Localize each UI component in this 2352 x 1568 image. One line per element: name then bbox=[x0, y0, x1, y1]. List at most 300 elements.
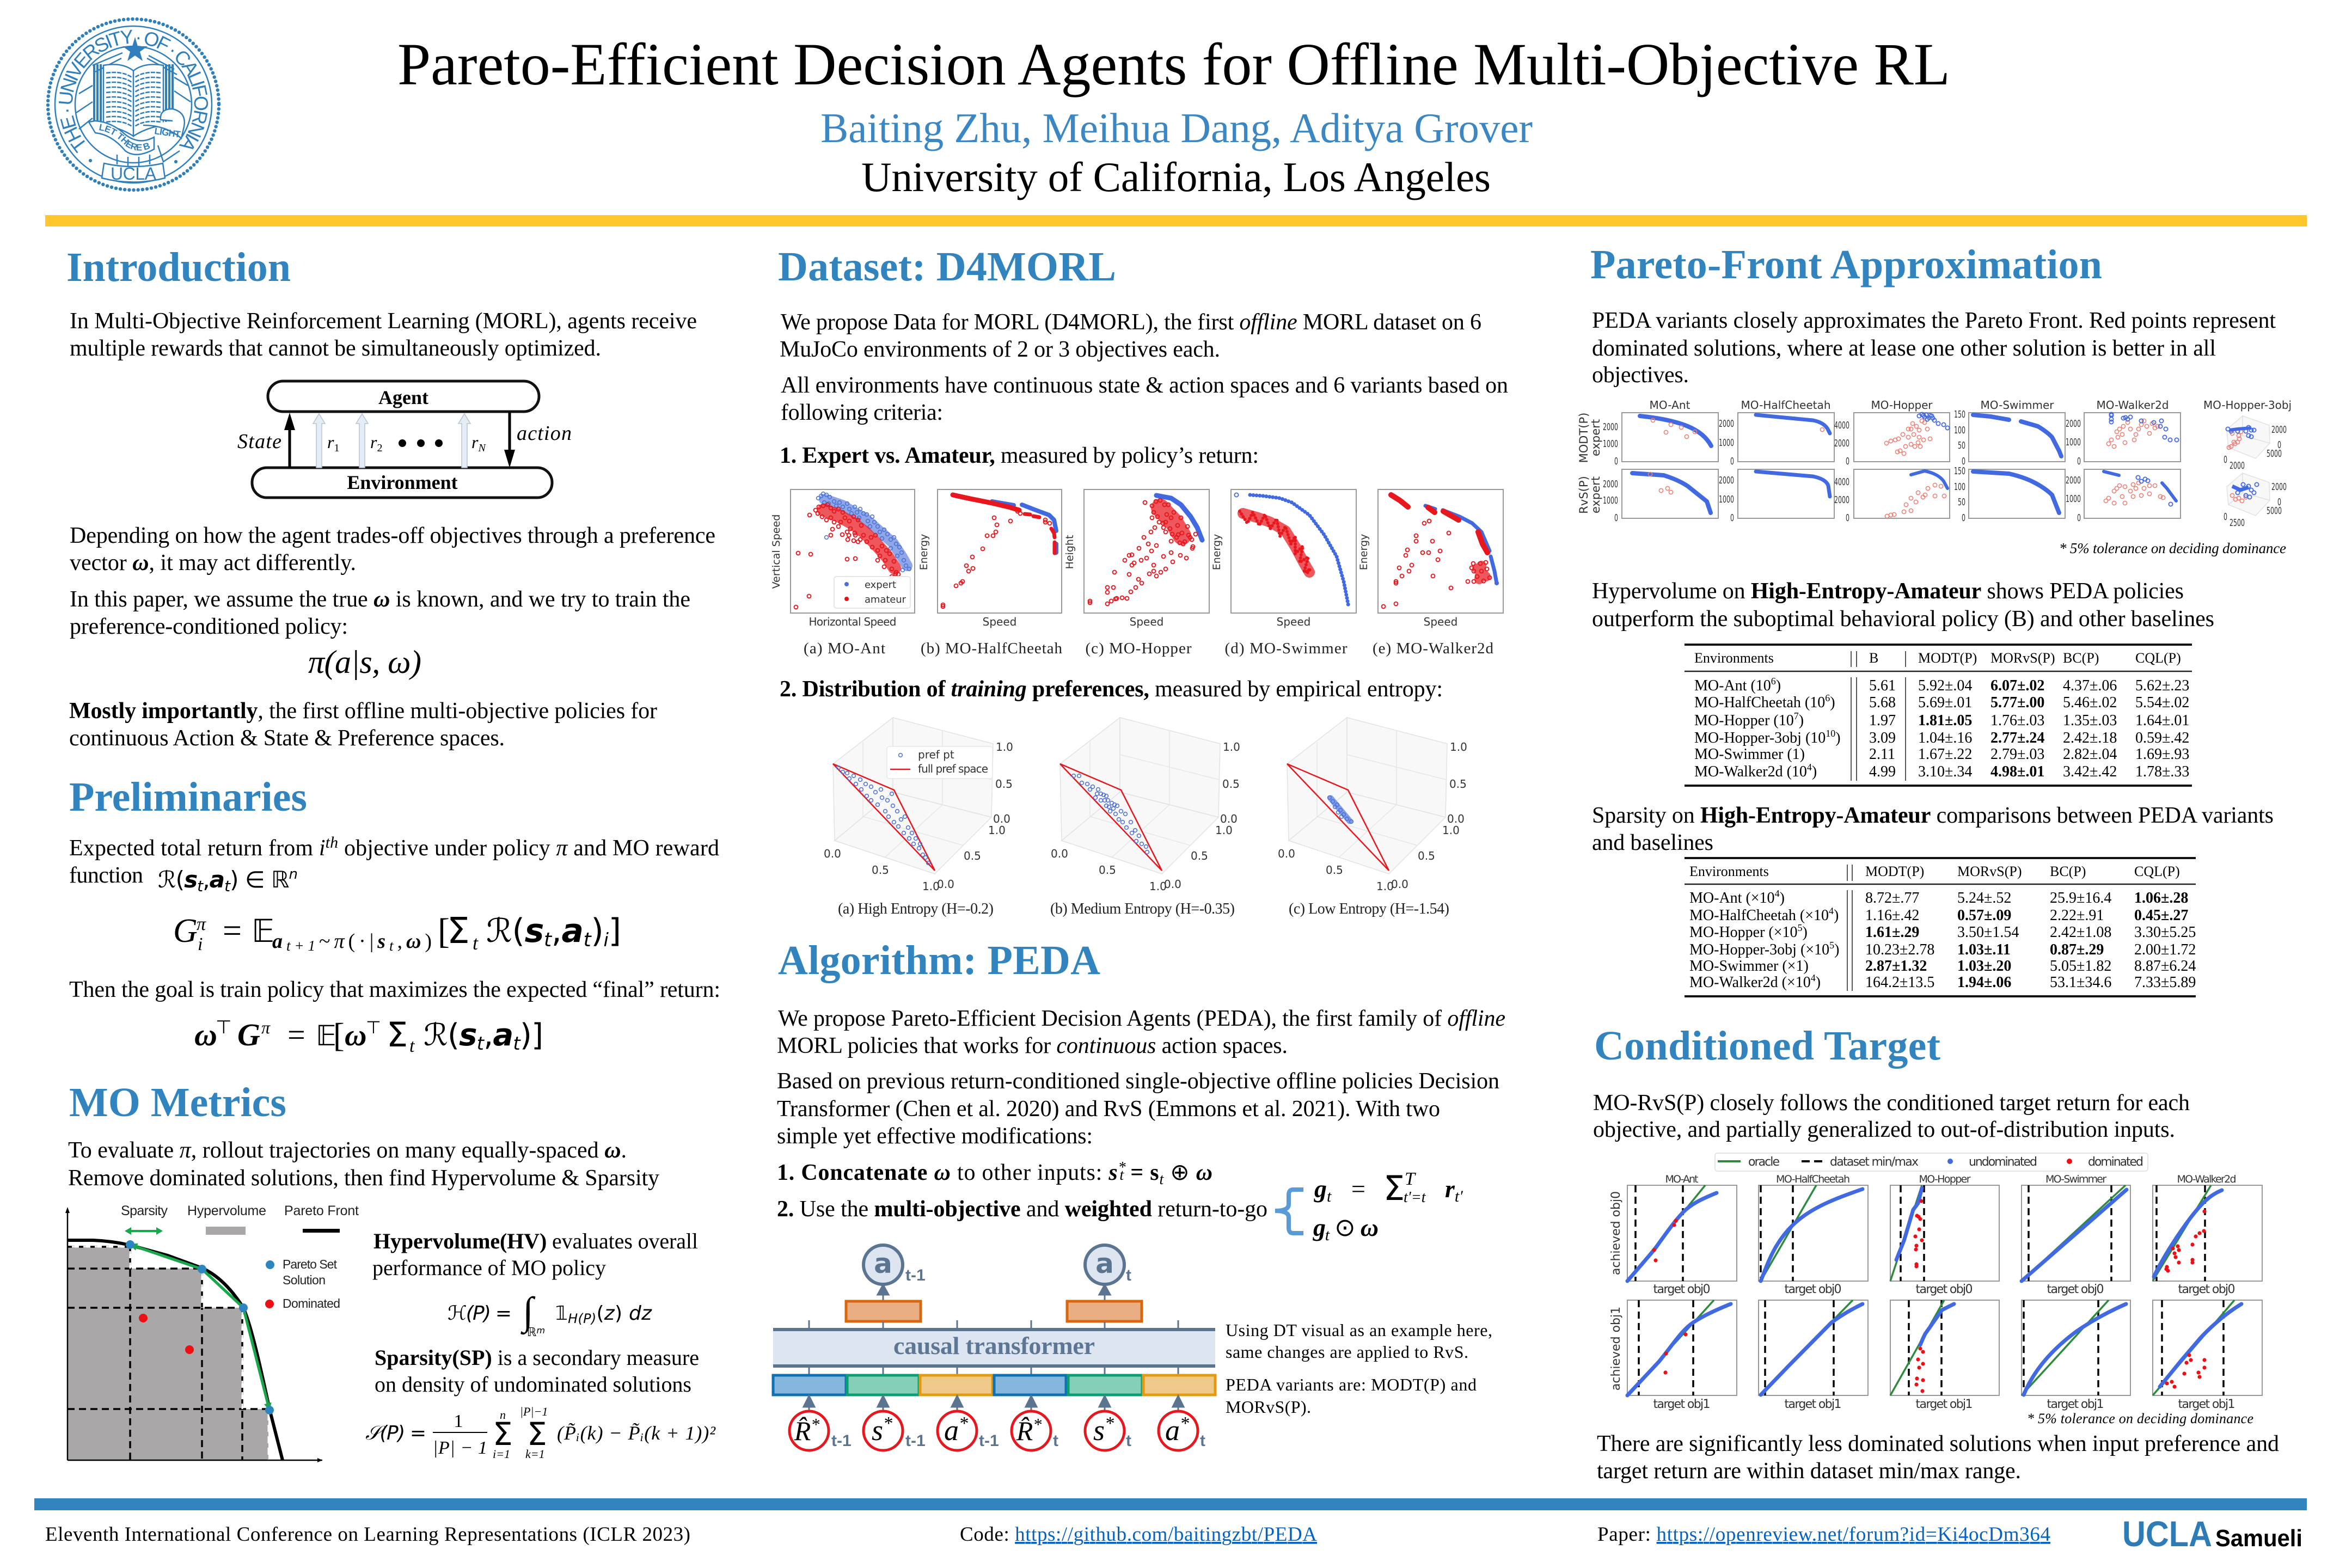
table: sparsity: ) bbox=[1834, 941, 1839, 958]
table: hypervolume: MO-Swimmer (1) bbox=[1694, 746, 1805, 763]
table: sparsity: MO-Hopper-3obj (×10 bbox=[1689, 941, 1829, 958]
plot: MODT Walker2d: 0 bbox=[2077, 456, 2081, 467]
plot: obj1 Walker2d bbox=[2153, 1300, 2262, 1395]
formula: return to go: t′ bbox=[1455, 1187, 1463, 1205]
input tokens: * bbox=[883, 1413, 892, 1434]
table: hypervolume: 5.62±.23 bbox=[2135, 677, 2189, 694]
plot: MODT Walker2d: 1000 bbox=[2066, 437, 2081, 448]
plot: MODT Hopper-3obj: 0 bbox=[2224, 454, 2227, 465]
text: conditioned target: MO-RvS(P) closely follows the conditioned target return for each bbox=[1593, 1091, 2190, 1116]
formula: objective return: i bbox=[198, 934, 203, 954]
formula: sparsity: 𝒮(P) = bbox=[365, 1422, 426, 1444]
plot: obj1 HalfCheetah bbox=[1759, 1300, 1868, 1395]
text: modification 1: * bbox=[1118, 1159, 1126, 1176]
table: sparsity: 0.87±.29 bbox=[2050, 941, 2104, 958]
formula: scalarized return: = bbox=[287, 1017, 305, 1052]
formula: hypervolume: ℋ(P) = bbox=[448, 1302, 512, 1325]
input tokens: t bbox=[1200, 1432, 1205, 1450]
table: sparsity: ) bbox=[1803, 924, 1808, 941]
formula: objective return: [ bbox=[438, 911, 450, 951]
formula: sparsity: n bbox=[500, 1408, 506, 1422]
plot: MODT Ant bbox=[1603, 413, 1718, 467]
table: sparsity: 7.33±5.89 bbox=[2134, 974, 2196, 991]
plot: MODT Swimmer bbox=[1954, 409, 2065, 467]
text: modification 1: 1. Concatenate ω to other inputs: s bbox=[777, 1160, 1118, 1185]
output actions: t bbox=[1126, 1266, 1131, 1284]
3d plot: medium entropy: 0.5 bbox=[1191, 849, 1208, 862]
formula: return to go: = bbox=[1351, 1175, 1365, 1203]
3d plot: medium entropy: 0.5 bbox=[1099, 863, 1116, 877]
table: sparsity: MO-Hopper (×10 bbox=[1689, 924, 1798, 941]
axis labels: target obj0 bbox=[1785, 1283, 1841, 1296]
legend: conditioned target plots bbox=[1715, 1153, 2148, 1171]
table: hypervolume: 5.61 bbox=[1869, 677, 1896, 694]
plot: MODT Walker2d bbox=[2066, 413, 2180, 467]
input tokens: s bbox=[872, 1414, 883, 1447]
plot: MODT Hopper: 4000 bbox=[1834, 420, 1849, 431]
axis labels: target obj1 bbox=[2178, 1398, 2235, 1411]
plot: MODT Hopper: 0 bbox=[1846, 456, 1849, 467]
3d plot: high entropy: 0.0 bbox=[824, 847, 841, 860]
text: dominated solutions line 2: target return are within dataset min/max range. bbox=[1597, 1459, 2021, 1484]
scatter: MO-Hopper bbox=[1064, 489, 1209, 628]
3d plot: medium entropy: 0.0 bbox=[1051, 847, 1068, 860]
table: sparsity: MO-Swimmer (×1) bbox=[1689, 958, 1809, 975]
formula: sparsity: |P|−1 bbox=[520, 1405, 548, 1418]
table: hypervolume: MO-Hopper (10 bbox=[1694, 712, 1794, 729]
text: importance line 2: continuous Action & State & Preference spaces. bbox=[69, 726, 505, 751]
text: proposal: We propose Data for MORL (D4MORL), the first offline MORL dataset on 6 bbox=[781, 310, 1481, 335]
formula: objective return: π bbox=[197, 914, 206, 934]
text: hypervolume line 2: performance of MO policy bbox=[372, 1255, 606, 1280]
intro text line 2: multiple rewards that cannot be simultaneously optimized. bbox=[70, 336, 601, 361]
text: PEDA proposal: We propose Pareto-Efficient Decision Agents (PEDA), the first family of offline bbox=[778, 1006, 1505, 1031]
3d plot: medium entropy bbox=[1051, 718, 1240, 893]
plot: MODT Walker2d: 2000 bbox=[2066, 418, 2081, 430]
formula: sparsity: Σ bbox=[493, 1416, 513, 1453]
3d plot: medium entropy: 1.0 bbox=[1149, 880, 1167, 893]
plot: RvS Hopper-3obj: 5000 bbox=[2267, 505, 2282, 517]
causal transformer block: causal transformer bbox=[893, 1332, 1095, 1359]
formula: scalarized return bbox=[194, 1015, 543, 1056]
logo: UCLA Samueli: Samueli bbox=[2215, 1525, 2302, 1552]
captions: return scatter plots: (c) MO-Hopper bbox=[1086, 640, 1192, 657]
row labels: expert bbox=[1589, 419, 1602, 456]
formula: hypervolume bbox=[448, 1289, 652, 1339]
table: sparsity: 164.2±13.5 bbox=[1865, 974, 1934, 991]
formula: return to go: g bbox=[1314, 1175, 1327, 1203]
3d plot: high entropy: 0.5 bbox=[964, 849, 981, 862]
plot: RvS Hopper: 4000 bbox=[1834, 476, 1849, 488]
table: sparsity: 5 bbox=[1829, 940, 1834, 951]
3d plot: medium entropy: 0.0 bbox=[1220, 812, 1238, 825]
footnote: tolerance: * 5% tolerance on deciding dominance bbox=[2059, 540, 2286, 556]
heading: pareto-front approximation: Pareto-Front Approximation bbox=[1590, 242, 2102, 287]
3d plot: high entropy: full pref space bbox=[918, 762, 988, 775]
plot: MODT HalfCheetah: 1000 bbox=[1719, 437, 1734, 449]
scatter: MO-Ant: Horizontal Speed bbox=[809, 615, 896, 628]
table: hypervolume: 6.07±.02 bbox=[1990, 677, 2044, 694]
footer: code link: Code: https://github.com/baitingzbt/PEDA bbox=[960, 1523, 1317, 1546]
text: modification 2: 2. Use the multi-objective and weighted return-to-go bbox=[777, 1197, 1267, 1222]
plot: MODT Hopper-3obj: 2000 bbox=[2271, 424, 2287, 436]
formula: scalarized return: t bbox=[513, 1033, 521, 1055]
formula: scalarized return: G bbox=[237, 1017, 260, 1052]
affiliation: University of California, Los Angeles bbox=[861, 154, 1491, 200]
input tokens: * bbox=[811, 1414, 819, 1434]
table: sparsity: 1.06±.28 bbox=[2134, 890, 2188, 906]
header: university seal: UCLA bbox=[111, 164, 157, 183]
text: evaluate: To evaluate π, rollout trajectories on many equally-spaced ω. bbox=[68, 1138, 627, 1163]
table: sparsity: MO-Ant (×10 bbox=[1689, 890, 1775, 906]
text: expected return: th bbox=[326, 834, 338, 852]
formula: return to go bbox=[1314, 1168, 1463, 1208]
note: DT visual line 2: same changes are applied to RvS. bbox=[1226, 1342, 1468, 1362]
header: university seal: LIGHT bbox=[154, 126, 181, 140]
formula: sparsity bbox=[365, 1405, 716, 1461]
3d plot: high entropy: 0.0 bbox=[937, 878, 954, 891]
plot: obj0 Walker2d bbox=[2153, 1185, 2262, 1281]
scatter: MO-Swimmer bbox=[1211, 489, 1356, 628]
plot: RvS Hopper-3obj: 2500 bbox=[2230, 517, 2245, 529]
input tokens: t bbox=[1126, 1432, 1131, 1450]
axis labels: target obj1 bbox=[1785, 1398, 1841, 1411]
plot: RvS Hopper: 2000 bbox=[1834, 494, 1849, 506]
formula: sparsity: (P̃ᵢ(k) − P̃ᵢ(k + 1))² bbox=[557, 1422, 716, 1444]
table: hypervolume: 5.77±.00 bbox=[1990, 694, 2044, 711]
legend: conditioned target plots: dominated bbox=[2088, 1155, 2143, 1169]
plot: RvS Hopper-3obj: 0 bbox=[2224, 511, 2227, 523]
table: sparsity: 0.45±.27 bbox=[2134, 907, 2188, 924]
axis labels: target obj0 bbox=[2178, 1283, 2235, 1296]
table: hypervolume: 5.46±.02 bbox=[2063, 694, 2117, 711]
plot: RvS HalfCheetah: 0 bbox=[1730, 512, 1734, 524]
plot titles: MO-Ant bbox=[1650, 399, 1690, 412]
panel: MO metrics bbox=[65, 1080, 716, 1462]
input tokens bbox=[789, 1411, 1205, 1450]
plot: RvS Walker2d: 0 bbox=[2077, 512, 2081, 524]
plot: RvS Swimmer bbox=[1954, 465, 2065, 524]
formula: reward function: t bbox=[197, 877, 204, 895]
plot titles: MO-Swimmer bbox=[1981, 399, 2054, 412]
formula: scalarized return: t bbox=[409, 1036, 415, 1056]
text: based on line 2: Transformer (Chen et al. 2020) and RvS (Emmons et al. 2021). With two bbox=[777, 1097, 1440, 1122]
input tokens: * bbox=[1180, 1413, 1189, 1434]
table: sparsity: MORvS(P) bbox=[1957, 863, 2022, 879]
diagram: agent environment loop: 1 bbox=[334, 442, 339, 454]
formula: scalarized return: t bbox=[477, 1033, 485, 1055]
formula: objective return: i bbox=[603, 929, 609, 951]
input tokens: R̂ bbox=[1016, 1416, 1033, 1446]
3d plot: high entropy: 1.0 bbox=[996, 740, 1013, 754]
legend: conditioned target plots: oracle bbox=[1748, 1155, 1780, 1169]
table: sparsity: 2.22±.91 bbox=[2050, 907, 2104, 924]
3d plot: low entropy: 0.0 bbox=[1278, 847, 1295, 860]
plot titles: MO-Ant bbox=[1665, 1173, 1699, 1185]
captions: return scatter plots: (a) MO-Ant bbox=[804, 640, 885, 657]
plot: MODT HalfCheetah bbox=[1719, 413, 1834, 467]
diagram: agent environment loop bbox=[237, 381, 572, 498]
table: sparsity: 5.24±.52 bbox=[1957, 890, 2011, 906]
plot: RvS Hopper: 0 bbox=[1846, 512, 1849, 524]
table: hypervolume: 5.68 bbox=[1869, 694, 1896, 711]
table: hypervolume: ) bbox=[1812, 763, 1817, 780]
table: sparsity: ) bbox=[1780, 890, 1785, 906]
heading: introduction: Introduction bbox=[66, 244, 291, 290]
scatter: MO-HalfCheetah: Speed bbox=[983, 615, 1016, 628]
output actions: a bbox=[874, 1248, 892, 1279]
formula: scalarized return: ⊤ bbox=[216, 1018, 232, 1038]
table: hypervolume: 3.42±.42 bbox=[2063, 763, 2117, 780]
scatter: MO-Ant: expert bbox=[865, 579, 896, 591]
table: hypervolume: 2.11 bbox=[1869, 746, 1895, 763]
plot titles: MO-Hopper bbox=[1871, 399, 1933, 412]
formula: sparsity: |P| − 1 bbox=[433, 1438, 487, 1458]
scatter: MO-Walker2d: Energy bbox=[1358, 534, 1370, 570]
3d plot: low entropy: 0.5 bbox=[1418, 849, 1435, 862]
input arrows bbox=[804, 1396, 1184, 1410]
table: hypervolume: 1.78±.33 bbox=[2135, 763, 2189, 780]
header: university seal: LET THERE BE bbox=[99, 124, 150, 150]
text: goal: Then the goal is train policy that maximizes the expected “final” return: bbox=[69, 977, 720, 1002]
text: conditioned target line 2: objective, and partially generalized to out-of-distribution inputs. bbox=[1593, 1117, 2175, 1142]
chart: pareto front staircase: Pareto Front bbox=[284, 1203, 359, 1218]
table: hypervolume: ) bbox=[1799, 712, 1804, 729]
text: expected return: π and MO reward bbox=[556, 836, 719, 861]
formula: objective return: Σ bbox=[447, 910, 470, 952]
formula: objective return: a bbox=[561, 912, 584, 950]
axis labels: achieved obj0 bbox=[1609, 1191, 1623, 1275]
table: sparsity: MO-HalfCheetah (×10 bbox=[1689, 907, 1829, 924]
output actions bbox=[846, 1245, 1142, 1321]
formula: objective return: a bbox=[272, 930, 283, 953]
table: hypervolume: 1.97 bbox=[1869, 712, 1896, 729]
heading: dataset: Dataset: D4MORL bbox=[778, 244, 1116, 290]
text: assumption line 2: preference-conditioned policy: bbox=[70, 614, 348, 639]
table: hypervolume: 5.54±.02 bbox=[2135, 694, 2189, 711]
axis labels: target obj1 bbox=[2047, 1398, 2104, 1411]
input tokens: t-1 bbox=[831, 1432, 852, 1450]
plot: MODT HalfCheetah: 0 bbox=[1730, 456, 1734, 467]
plot: RvS Hopper-3obj: 2000 bbox=[2271, 481, 2287, 493]
formula: scalarized return: ⊤ bbox=[366, 1018, 381, 1037]
plot: MODT Swimmer: 0 bbox=[1962, 456, 1965, 467]
formula: return to go: Σ bbox=[1383, 1168, 1405, 1208]
formula: scalarized return: Σ bbox=[387, 1015, 408, 1055]
formula: reward function: ) ∈ ℝ bbox=[230, 866, 289, 893]
3d plot: high entropy: 1.0 bbox=[922, 880, 940, 893]
footer: paper link: Paper: https://openreview.net/forum?id=Ki4ocDm364 bbox=[1597, 1523, 2050, 1546]
formula: scalarized return: , bbox=[483, 1018, 493, 1053]
plot titles: MO-HalfCheetah bbox=[1776, 1173, 1850, 1185]
plot: obj0 Ant bbox=[1627, 1185, 1737, 1281]
table: sparsity: 5 bbox=[1798, 922, 1803, 933]
table: sparsity: 1.16±.42 bbox=[1865, 907, 1919, 924]
plot: MODT Ant: 2000 bbox=[1603, 421, 1618, 433]
3d plot: low entropy bbox=[1278, 718, 1467, 893]
formula: sparsity: i=1 bbox=[493, 1447, 510, 1461]
scatter: MO-Ant: Vertical Speed bbox=[770, 514, 782, 589]
plot: RvS Walker2d: 2000 bbox=[2066, 475, 2081, 486]
table: hypervolume: 6 bbox=[1771, 676, 1776, 687]
formula: objective return: 𝔼 bbox=[252, 912, 274, 950]
table: sparsity: 2.87±1.32 bbox=[1865, 958, 1927, 975]
table: sparsity: 53.1±34.6 bbox=[2050, 974, 2111, 991]
formula: reward function: , bbox=[203, 866, 210, 893]
text: remove dominated: Remove dominated solutions, then find Hypervolume & Sparsity bbox=[68, 1166, 659, 1191]
plot: obj0 HalfCheetah bbox=[1759, 1185, 1868, 1281]
text: preference vector: Depending on how the agent trades-off objectives through a preference bbox=[70, 523, 715, 548]
formula: return to go: r bbox=[1445, 1175, 1455, 1203]
plot titles: MO-Swimmer bbox=[2045, 1173, 2106, 1185]
formula: objective return: G bbox=[173, 912, 198, 950]
text: hypervolume: Hypervolume(HV) evaluates overall bbox=[373, 1229, 698, 1253]
formula: objective return: t+1 bbox=[286, 938, 315, 954]
diagram: agent environment loop: Agent bbox=[378, 387, 428, 408]
formula: reward function: a bbox=[210, 866, 225, 893]
row labels: expert bbox=[1589, 476, 1602, 513]
chart: pareto front staircase: Solution bbox=[283, 1273, 326, 1287]
text: environments line 2: following criteria: bbox=[781, 400, 943, 425]
captions: return scatter plots: (e) MO-Walker2d bbox=[1373, 640, 1494, 657]
table: sparsity: CQL(P) bbox=[2134, 863, 2180, 879]
row labels bbox=[1577, 413, 1602, 514]
text: approximation line 2: dominated solutions, where at lease one other solution is better in all bbox=[1592, 336, 2216, 361]
plot: obj0 Swimmer bbox=[2022, 1185, 2130, 1281]
formula: reward function: t bbox=[224, 877, 231, 895]
table: hypervolume: Environments bbox=[1694, 650, 1774, 666]
text: dominated solutions: There are significantly less dominated solutions when input preference and bbox=[1597, 1431, 2279, 1456]
authors: Baiting Zhu, Meihua Dang, Aditya Grover bbox=[820, 105, 1533, 151]
heading: preliminaries: Preliminaries bbox=[69, 774, 307, 820]
plot: MODT Hopper-3obj: 2000 bbox=[2230, 460, 2245, 471]
text: proposal line 2: MuJoCo environments of 2 or 3 objectives each. bbox=[780, 337, 1220, 362]
table: hypervolume: 7 bbox=[1794, 710, 1799, 721]
plot: MODT Hopper-3obj: 0 bbox=[2277, 439, 2281, 451]
scatter: MO-Hopper: Speed bbox=[1130, 615, 1163, 628]
text: sparsity line 2: on density of undominated solutions bbox=[375, 1372, 691, 1396]
table: hypervolume: 10 bbox=[1826, 728, 1835, 739]
formula: objective return: t bbox=[544, 929, 553, 951]
3d plot: low entropy: 0.0 bbox=[1391, 878, 1408, 891]
table: hypervolume: MO-Hopper-3obj (10 bbox=[1694, 730, 1826, 746]
chart: pareto front staircase: Sparsity bbox=[121, 1203, 168, 1218]
captions: return scatter plots: (b) MO-HalfCheetah bbox=[921, 640, 1063, 657]
3d plot: medium entropy: 1.0 bbox=[1223, 740, 1240, 754]
table: hypervolume: 4.99 bbox=[1869, 763, 1896, 780]
diagram: decision transformer bbox=[773, 1245, 1215, 1450]
plot titles bbox=[1650, 399, 2292, 412]
plot: MODT HalfCheetah: 2000 bbox=[1719, 418, 1734, 430]
table: sparsity: 10.23±2.78 bbox=[1865, 941, 1934, 958]
formula: objective return: ℛ(s bbox=[486, 912, 544, 950]
table: sparsity: 3.30±5.25 bbox=[2134, 924, 2196, 941]
3d plot: high entropy: 1.0 bbox=[988, 824, 1006, 837]
table: hypervolume: 1.76±.03 bbox=[1990, 712, 2044, 729]
table: hypervolume: 1.64±.01 bbox=[2135, 712, 2189, 729]
formula: scalarized return: a bbox=[493, 1018, 513, 1053]
formula: return to go: T bbox=[1405, 1169, 1416, 1189]
formula: weighted return: t bbox=[1325, 1226, 1330, 1244]
header divider bar bbox=[45, 215, 2307, 226]
table: hypervolume: MODT(P) bbox=[1918, 650, 1977, 666]
table: hypervolume: 6 bbox=[1825, 693, 1830, 703]
plot: MODT Ant: 0 bbox=[1614, 456, 1618, 467]
3d plot: low entropy: 0.0 bbox=[1447, 812, 1465, 825]
table: hypervolume: ) bbox=[1776, 677, 1781, 694]
formula: hypervolume: H(P) bbox=[568, 1311, 596, 1326]
table: sparsity: ) bbox=[1816, 974, 1821, 991]
scatter: MO-Swimmer: Speed bbox=[1277, 615, 1310, 628]
input tokens: t bbox=[1053, 1432, 1058, 1450]
table: sparsity: Environments bbox=[1689, 863, 1769, 879]
formula: objective return: ) bbox=[591, 912, 604, 950]
text: expected return: Expected total return from i bbox=[69, 836, 326, 861]
plot titles: MO-Hopper bbox=[1919, 1173, 1971, 1185]
table: hypervolume: 1.67±.22 bbox=[1918, 746, 1972, 763]
diagram: agent environment loop: action bbox=[517, 422, 572, 445]
text: based on: Based on previous return-conditioned single-objective offline policies Decision bbox=[777, 1069, 1499, 1094]
axis labels: target obj0 bbox=[2047, 1283, 2104, 1296]
scatter: MO-HalfCheetah: Energy bbox=[918, 534, 930, 570]
plot: RvS HalfCheetah: 1000 bbox=[1719, 494, 1734, 505]
formula: return to go: t′=t bbox=[1404, 1189, 1426, 1206]
text: expected return: objective under policy bbox=[338, 836, 556, 861]
formula: sparsity: k=1 bbox=[525, 1447, 545, 1461]
formula: objective return: ω) bbox=[406, 930, 432, 953]
axis labels: target obj0 bbox=[1915, 1283, 1973, 1296]
table: sparsity: 4 bbox=[1775, 888, 1780, 899]
plot: RvS Swimmer: 100 bbox=[1954, 481, 1965, 493]
plot: RvS Ant: 2000 bbox=[1603, 479, 1618, 490]
3d plot: low entropy: 0.5 bbox=[1326, 863, 1343, 877]
scatter: MO-Swimmer: Energy bbox=[1211, 534, 1223, 570]
diagram: agent environment loop: r bbox=[370, 432, 377, 452]
formula: weighted return: ⊙ bbox=[1329, 1214, 1361, 1241]
table: hypervolume: MO-Ant (10 bbox=[1694, 677, 1771, 694]
text: sparsity intro: Sparsity on High-Entropy-Amateur comparisons between PEDA variants bbox=[1592, 803, 2274, 828]
formula: scalarized return: ω bbox=[345, 1019, 367, 1052]
formula: reward function: ℛ(s bbox=[158, 866, 198, 893]
table: hypervolume: B bbox=[1869, 650, 1878, 666]
formula: sparsity: 1 bbox=[454, 1411, 463, 1431]
footer: conference: Eleventh International Conference on Learning Representations (ICLR 2023) bbox=[45, 1523, 690, 1546]
plot: RvS Swimmer: 150 bbox=[1954, 465, 1965, 477]
plot: obj1 Hopper bbox=[1890, 1300, 1999, 1395]
table: sparsity: 2.42±1.08 bbox=[2050, 924, 2111, 941]
diagram: agent environment loop: N bbox=[477, 442, 486, 454]
table: hypervolume: ) bbox=[1830, 694, 1835, 711]
table: hypervolume: BC(P) bbox=[2063, 650, 2099, 666]
table: sparsity: BC(P) bbox=[2050, 863, 2086, 879]
formula: objective return: ] bbox=[609, 912, 621, 950]
note: variants line 2: MORvS(P). bbox=[1226, 1397, 1311, 1417]
plot: obj1 Ant bbox=[1627, 1300, 1737, 1395]
axis labels: target obj1 bbox=[1915, 1398, 1973, 1411]
table: hypervolume bbox=[1685, 645, 2192, 786]
table: sparsity: 4 bbox=[1811, 972, 1816, 983]
3d plot: high entropy: 0.5 bbox=[995, 777, 1013, 791]
text: hypervolume intro line 2: outperform the suboptimal behavioral policy (B) and other baselines bbox=[1592, 607, 2214, 632]
captions: entropy plots: (c) Low Entropy (H=-1.54) bbox=[1289, 901, 1449, 917]
3d plot: medium entropy: 0.5 bbox=[1222, 777, 1240, 791]
icon: brace bbox=[1275, 1190, 1303, 1233]
formula: hypervolume: ∫ bbox=[520, 1289, 536, 1335]
text: sparsity intro line 2: and baselines bbox=[1592, 830, 1713, 855]
table: sparsity: 1.03±.11 bbox=[1957, 941, 2011, 958]
chart: pareto front staircase bbox=[65, 1203, 359, 1462]
plot: RvS Hopper bbox=[1834, 469, 1950, 524]
